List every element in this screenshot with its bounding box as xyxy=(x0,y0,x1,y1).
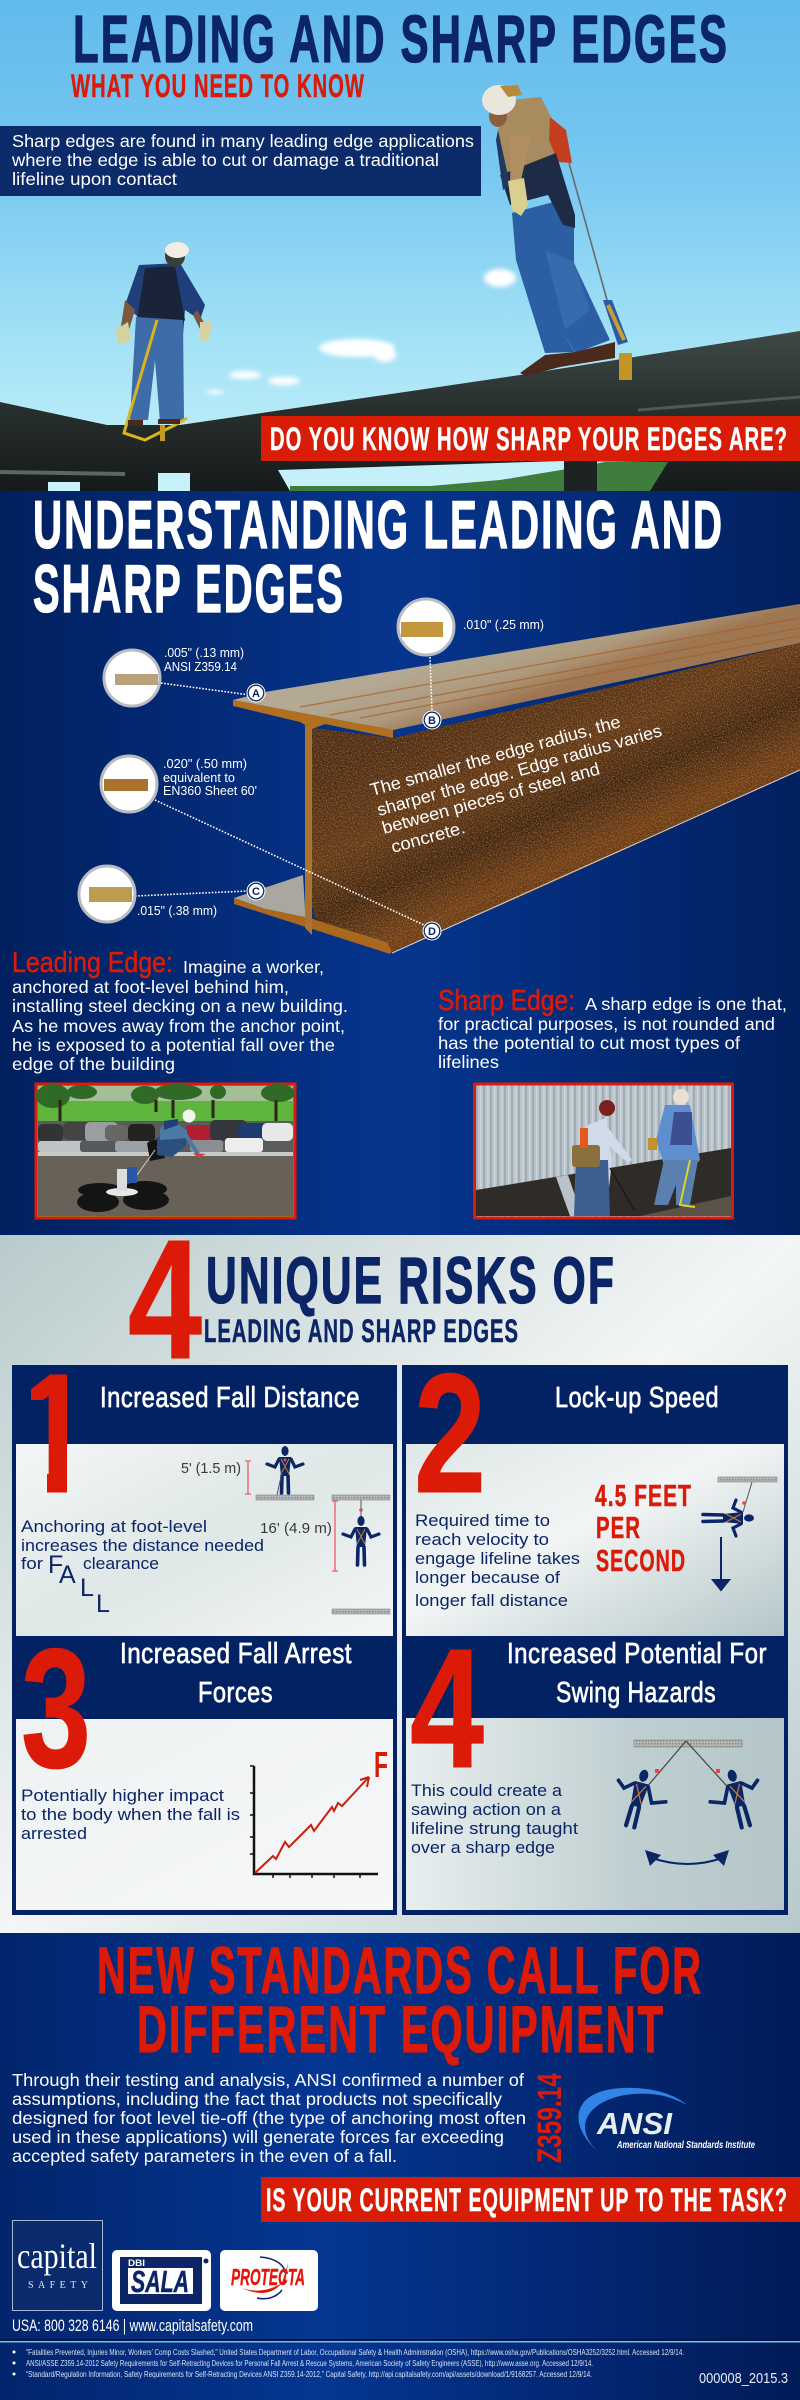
text block: required time: Required time to xyxy=(415,1511,550,1530)
text block: required time: engage lifeline takes xyxy=(415,1549,580,1568)
divider rule xyxy=(0,2339,800,2342)
panel: hero photo xyxy=(0,0,800,491)
heading: risk 3: Increased Fall Arrest xyxy=(120,1638,352,1670)
text block: anchoring: Anchoring at foot-level xyxy=(21,1517,207,1536)
panel: risk 2 xyxy=(402,1339,788,1636)
label: Z359.14: Z359.14 xyxy=(531,2073,569,2163)
logo: PROTECTA: PROTECTA xyxy=(231,2264,305,2290)
text block: anchoring: L xyxy=(96,1590,110,1618)
text block: leading edge xyxy=(12,947,348,1074)
text block: edge radius: concrete. xyxy=(389,817,467,857)
diagram: fall clearance: 16' (4.9 m) xyxy=(260,1520,332,1537)
text block: edge radius: The smaller the edge radius, the xyxy=(368,711,623,800)
logo: ANSI xyxy=(578,2088,755,2153)
diagram: swing hazard xyxy=(608,1740,768,1866)
text block: ANSI testing: designed for foot level tie-off (the type of anchoring most often xyxy=(12,2108,526,2128)
logo: Capital Safety: SAFETY xyxy=(28,2280,88,2291)
stat: 4.5 feet per second: SECOND xyxy=(596,1543,686,1578)
worker: left xyxy=(115,242,213,441)
callout: C detail xyxy=(79,866,217,922)
text block: leading edge: Imagine a worker, xyxy=(183,957,324,977)
diagram: fall clearance xyxy=(181,1446,390,1614)
panel: risk 1 xyxy=(12,1339,397,1636)
diagram: fall clearance: 5' (1.5 m) xyxy=(181,1460,241,1477)
text block: leading edge: Leading Edge: xyxy=(12,947,173,979)
badge: D: D xyxy=(428,926,436,938)
text block: anchoring: increases the distance needed xyxy=(21,1536,264,1555)
text block: intro xyxy=(0,126,481,196)
stat: 4.5 feet per second xyxy=(595,1478,692,1578)
badge: C xyxy=(246,882,266,900)
callout: D detail: equivalent to xyxy=(163,770,235,785)
callout: D detail: EN360 Sheet 60' xyxy=(163,783,257,798)
line chart: force rising: F xyxy=(374,1744,388,1785)
text block: sharp edge xyxy=(438,985,787,1072)
footnotes: “Standard/Regulation Information, Safety Requirements for Self-Retracting Devices ANSI Z359.14-2012,” Capital Safety, http://api.capitalsafety.com/api/assets/download/1/9168257. Accessed 12/9/14. xyxy=(26,2370,592,2379)
text block: sharp edge: for practical purposes, is not rounded and xyxy=(438,1014,775,1034)
heading: risk 2: Lock-up Speed xyxy=(555,1382,719,1414)
text block: anchoring xyxy=(21,1517,264,1618)
callout: D detail xyxy=(101,756,257,812)
text block: anchoring: clearance xyxy=(83,1554,159,1573)
text block: edge radius: between pieces of steel and xyxy=(380,758,602,838)
heading: risk 1: Increased Fall Distance xyxy=(100,1382,360,1414)
callout: D detail: .020" (.50 mm) xyxy=(163,756,247,771)
text block: ANSI testing: accepted safety parameters in the even of a fall. xyxy=(12,2146,397,2166)
icon: falling worker on lanyard xyxy=(343,1500,379,1565)
contact line: USA: 800 328 6146 | www.capitalsafety.com xyxy=(12,2316,253,2335)
heading: understanding xyxy=(33,487,724,627)
heading: new standards xyxy=(97,1933,703,2066)
text block: leading edge: anchored at foot-level behind him, xyxy=(12,977,289,997)
icon: horizontal falling worker xyxy=(703,1477,777,1536)
stat: 4.5 feet per second: PER xyxy=(596,1510,641,1545)
heading: risk 4 xyxy=(507,1638,767,1709)
text block: ANSI testing: used in these applications) will generate forces far exceeding xyxy=(12,2127,504,2147)
heading: unique risks xyxy=(204,1243,616,1349)
logo: PROTECTA xyxy=(220,2250,318,2311)
text block: sharp edge: Sharp Edge: xyxy=(438,985,575,1017)
text block: sawing action: over a sharp edge xyxy=(411,1838,555,1857)
text block: edge radius: sharper the edge. Edge radius varies xyxy=(375,720,664,820)
callout: C detail: .015" (.38 mm) xyxy=(137,903,217,918)
arrow: down xyxy=(713,1537,729,1590)
text block: anchoring: for xyxy=(21,1554,43,1573)
text block: sawing action: sawing action on a xyxy=(411,1800,562,1819)
text block: leading edge: edge of the building xyxy=(12,1054,175,1074)
text block: anchoring: A xyxy=(59,1561,76,1589)
text block: edge radius xyxy=(368,711,664,857)
panel: four unique risks section xyxy=(0,1205,800,1933)
heading: risk 3: Forces xyxy=(198,1677,273,1709)
number: 2: 2 xyxy=(414,1339,486,1529)
distant hills xyxy=(160,462,668,491)
badge: B: B xyxy=(428,715,436,727)
badge: D xyxy=(422,922,442,940)
text block: leading edge: installing steel decking on a new building. xyxy=(12,996,348,1016)
logo: DBI SALA: SALA xyxy=(131,2264,189,2299)
badge: A xyxy=(246,684,266,702)
logo: DBI SALA: DBI xyxy=(128,2258,145,2268)
panel: new standards section xyxy=(0,1933,800,2400)
line chart: force rising xyxy=(250,1744,388,1878)
logo: DBI SALA xyxy=(112,2250,211,2311)
number: 4: 4 xyxy=(410,1614,484,1804)
icon: swinging worker left xyxy=(608,1764,672,1834)
icon: swinging worker right xyxy=(704,1764,768,1834)
panel: risk 4 xyxy=(402,1614,788,1915)
text block: required time: reach velocity to xyxy=(415,1530,549,1549)
text block: leading edge: he is exposed to a potential fall over the xyxy=(12,1035,335,1055)
worker: right xyxy=(482,85,632,380)
text block: required time: longer because of xyxy=(415,1568,560,1587)
dotted leader lines xyxy=(135,657,432,925)
text block: intro: lifeline upon contact xyxy=(12,169,177,189)
photo: workers by corrugated wall xyxy=(474,1084,732,1218)
text block: sharp edge: has the potential to cut most types of xyxy=(438,1033,740,1053)
heading: understanding: SHARP EDGES xyxy=(33,551,345,627)
text block: sharp edge: A sharp edge is one that, xyxy=(585,994,787,1014)
text block: sawing action xyxy=(411,1781,578,1857)
panel: risk 3 xyxy=(12,1614,397,1915)
badge: C: C xyxy=(252,886,260,898)
logo: Capital Safety xyxy=(12,2220,102,2310)
heading: risk 4: Swing Hazards xyxy=(556,1677,716,1709)
logo: ANSI: ANSI xyxy=(596,2106,673,2141)
text block: sharp edge: lifelines xyxy=(438,1052,499,1072)
footnotes xyxy=(12,2348,684,2379)
icon: standing worker xyxy=(267,1446,303,1495)
callout: A detail: ANSI Z359.14 xyxy=(164,659,237,674)
logo: ANSI: American National Standards Institute xyxy=(616,2140,755,2151)
callout: A detail: .005" (.13 mm) xyxy=(164,645,244,660)
stat: 4.5 feet per second: 4.5 FEET xyxy=(595,1478,692,1513)
footnotes: ANSI/ASSE Z359.14-2012 Safety Requirements for Self-Retracting Devices for Personal Fall Arrest & Rescue Systems, American Society of Safety Engineers (ASSE), http://www.asse.org. Accessed 12/9/14. xyxy=(26,2359,593,2368)
text block: anchoring: L xyxy=(80,1574,94,1602)
photo: worker on roof anchored at foot level xyxy=(36,1084,295,1218)
text block: sawing action: This could create a xyxy=(411,1781,563,1800)
text block: impact: arrested xyxy=(21,1824,87,1843)
text block: leading edge: As he moves away from the anchor point, xyxy=(12,1016,345,1036)
text block: required time xyxy=(415,1511,580,1610)
text block: impact: Potentially higher impact xyxy=(21,1786,224,1805)
heading: unique risks: LEADING AND SHARP EDGES xyxy=(204,1313,519,1349)
text block: intro: where the edge is able to cut or damage a traditional xyxy=(11,150,439,170)
callout: A detail xyxy=(104,645,244,706)
subtitle: WHAT YOU NEED TO KNOW xyxy=(71,68,365,104)
panel: understanding section xyxy=(0,487,800,1236)
badge: B xyxy=(422,710,442,730)
text block: impact xyxy=(21,1786,240,1843)
logo: Capital Safety: capital xyxy=(17,2236,97,2276)
number: 3: 3 xyxy=(21,1614,91,1804)
text block: anchoring: F xyxy=(48,1551,63,1579)
badge: A: A xyxy=(252,688,260,700)
text block: ANSI testing xyxy=(12,2070,526,2166)
steel structure xyxy=(0,331,800,491)
callout: B detail xyxy=(398,599,544,655)
text block: impact: to the body when the fall is xyxy=(21,1805,240,1824)
i-beam illustration xyxy=(233,604,800,954)
arrow: swing direction xyxy=(645,1850,729,1866)
callout: B detail: .010" (.25 mm) xyxy=(463,617,544,632)
text block: ANSI testing: assumptions, including the fact that products not specifically xyxy=(12,2089,502,2109)
big number 4: 4 xyxy=(128,1205,202,1395)
heading: risk 3 xyxy=(120,1638,352,1709)
number: 1: 1 xyxy=(16,1339,96,1529)
clouds xyxy=(206,269,516,394)
text block: required time: longer fall distance xyxy=(415,1591,568,1610)
text block: ANSI testing: Through their testing and analysis, ANSI confirmed a number of xyxy=(12,2070,524,2090)
text block: intro: Sharp edges are found in many leading edge applications xyxy=(12,131,474,151)
text block: sawing action: lifeline strung taught xyxy=(411,1819,578,1838)
